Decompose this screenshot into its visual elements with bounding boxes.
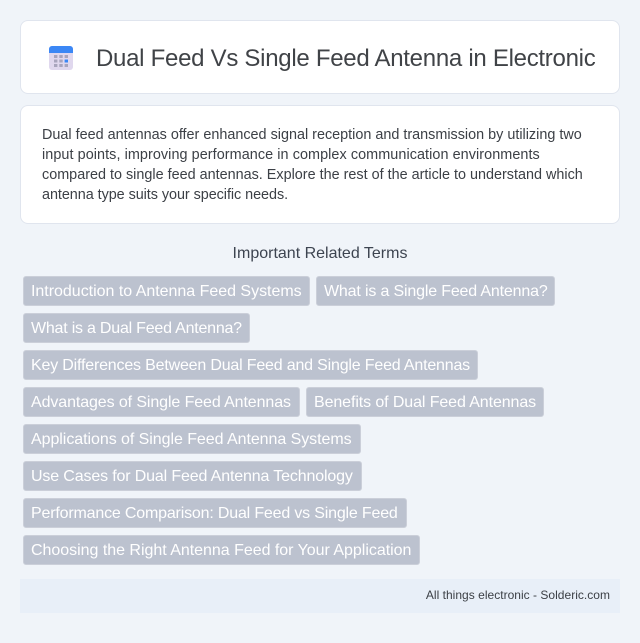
tag: What is a Single Feed Antenna? [324,283,548,300]
tag [23,350,478,380]
title: Dual Feed Vs Single Feed Antenna in Electronic [96,45,595,72]
tag [23,424,361,454]
tag [23,461,362,491]
intro text: compared to single feed antennas. Explore the rest of the article to understand which [42,167,583,183]
header card [20,20,620,94]
icon: calendar [49,46,73,70]
tag: Choosing the Right Antenna Feed for Your Application [31,542,411,559]
intro card [20,105,620,224]
tag: Benefits of Dual Feed Antennas [314,394,536,411]
intro text: input points, improving performance in complex communication environments [42,147,540,163]
tag [23,313,250,343]
tag: Introduction to Antenna Feed Systems [31,283,302,300]
tag: Key Differences Between Dual Feed and Single Feed Antennas [31,357,470,374]
tag [23,387,300,417]
tag [23,535,420,565]
tag [306,387,544,417]
tag: Performance Comparison: Dual Feed vs Single Feed [31,505,398,522]
tag: Advantages of Single Feed Antennas [31,394,291,411]
tag [23,276,310,306]
tag [23,498,407,528]
tag [316,276,555,306]
intro text: Dual feed antennas offer enhanced signal reception and transmission by utilizing two [42,127,582,143]
intro text: antenna type suits your specific needs. [42,187,288,203]
tag: Applications of Single Feed Antenna Systems [31,431,352,448]
tag: What is a Dual Feed Antenna? [31,320,242,337]
intro text [42,127,583,203]
section heading: Important Related Terms [233,245,407,262]
tag: Use Cases for Dual Feed Antenna Technology [31,468,353,485]
footer [20,579,620,613]
footer text: All things electronic - Solderic.com [426,588,610,602]
